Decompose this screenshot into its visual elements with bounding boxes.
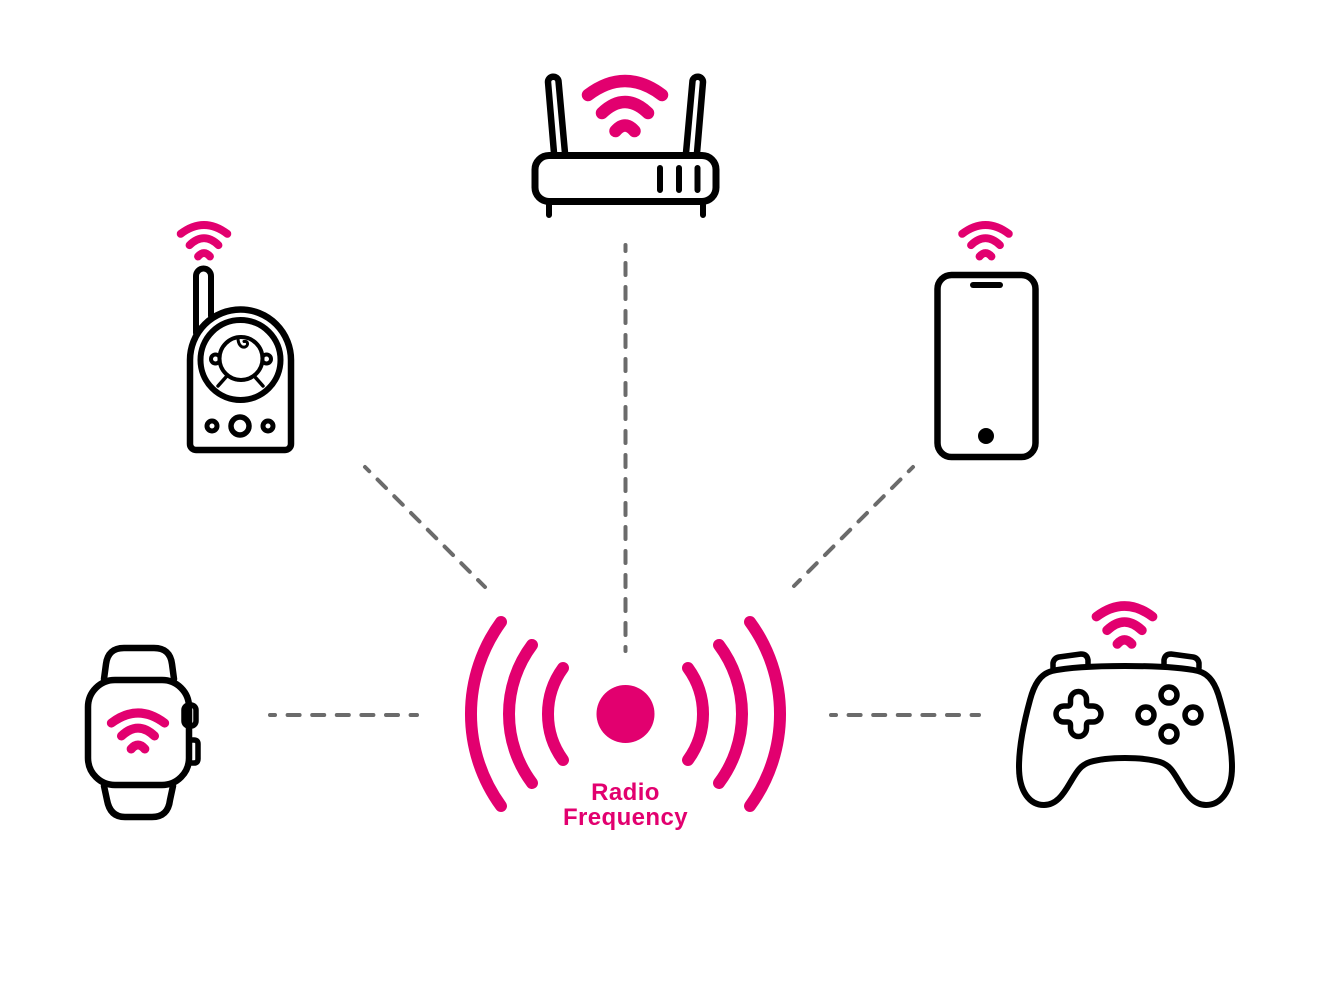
dashed connector: to router [624,245,628,651]
dashed connector: to baby monitor [365,467,485,587]
dashed connector: to watch [270,713,417,717]
dashed connector: to game controller [831,713,979,717]
dashed connector: to phone [794,467,913,586]
icon: game controller [1019,606,1232,805]
label: Radio Frequency: Frequency [563,804,688,831]
icon: router [535,77,716,215]
icon: radio frequency emitter [471,622,780,806]
icon: smartphone [938,225,1036,457]
icon: smartwatch [88,648,198,817]
label: Radio Frequency: Radio [591,779,660,806]
icon: baby monitor [181,225,291,450]
